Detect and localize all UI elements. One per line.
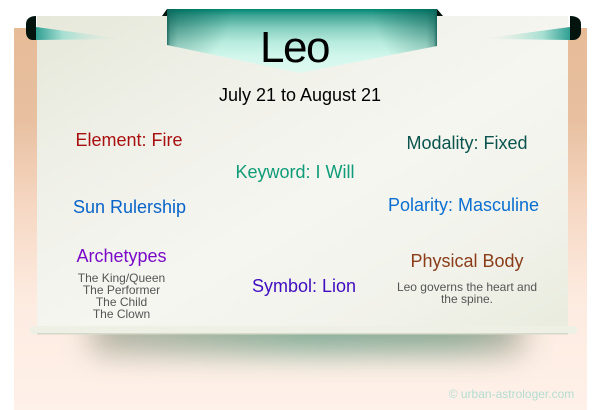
paper shadow (92, 290, 522, 354)
right corner tab (480, 16, 581, 40)
physical body block: Leo governs the heart and (397, 280, 537, 294)
element label: Element: Fire (75, 130, 183, 150)
left corner tab (26, 16, 125, 40)
top banner ribbon (162, 9, 443, 73)
copyright watermark: © urban-astrologer.com (449, 387, 574, 401)
physical body block (397, 251, 537, 306)
sun rulership label: Sun Rulership (73, 197, 186, 217)
archetypes block: The Clown (93, 307, 150, 321)
archetypes block (76, 246, 167, 321)
paper sheet (30, 16, 577, 334)
archetypes block: The Performer (83, 283, 160, 297)
physical body block: the spine. (441, 292, 493, 306)
archetypes block: The King/Queen (78, 271, 165, 285)
date range: July 21 to August 21 (219, 85, 381, 105)
modality label: Modality: Fixed (406, 133, 528, 153)
archetypes block: Archetypes (76, 246, 167, 266)
symbol label: Symbol: Lion (252, 276, 356, 296)
title: Leo (260, 23, 329, 72)
archetypes block: The Child (96, 295, 147, 309)
keyword label: Keyword: I Will (235, 162, 355, 182)
polarity label: Polarity: Masculine (388, 195, 539, 215)
physical body block: Physical Body (410, 251, 524, 271)
